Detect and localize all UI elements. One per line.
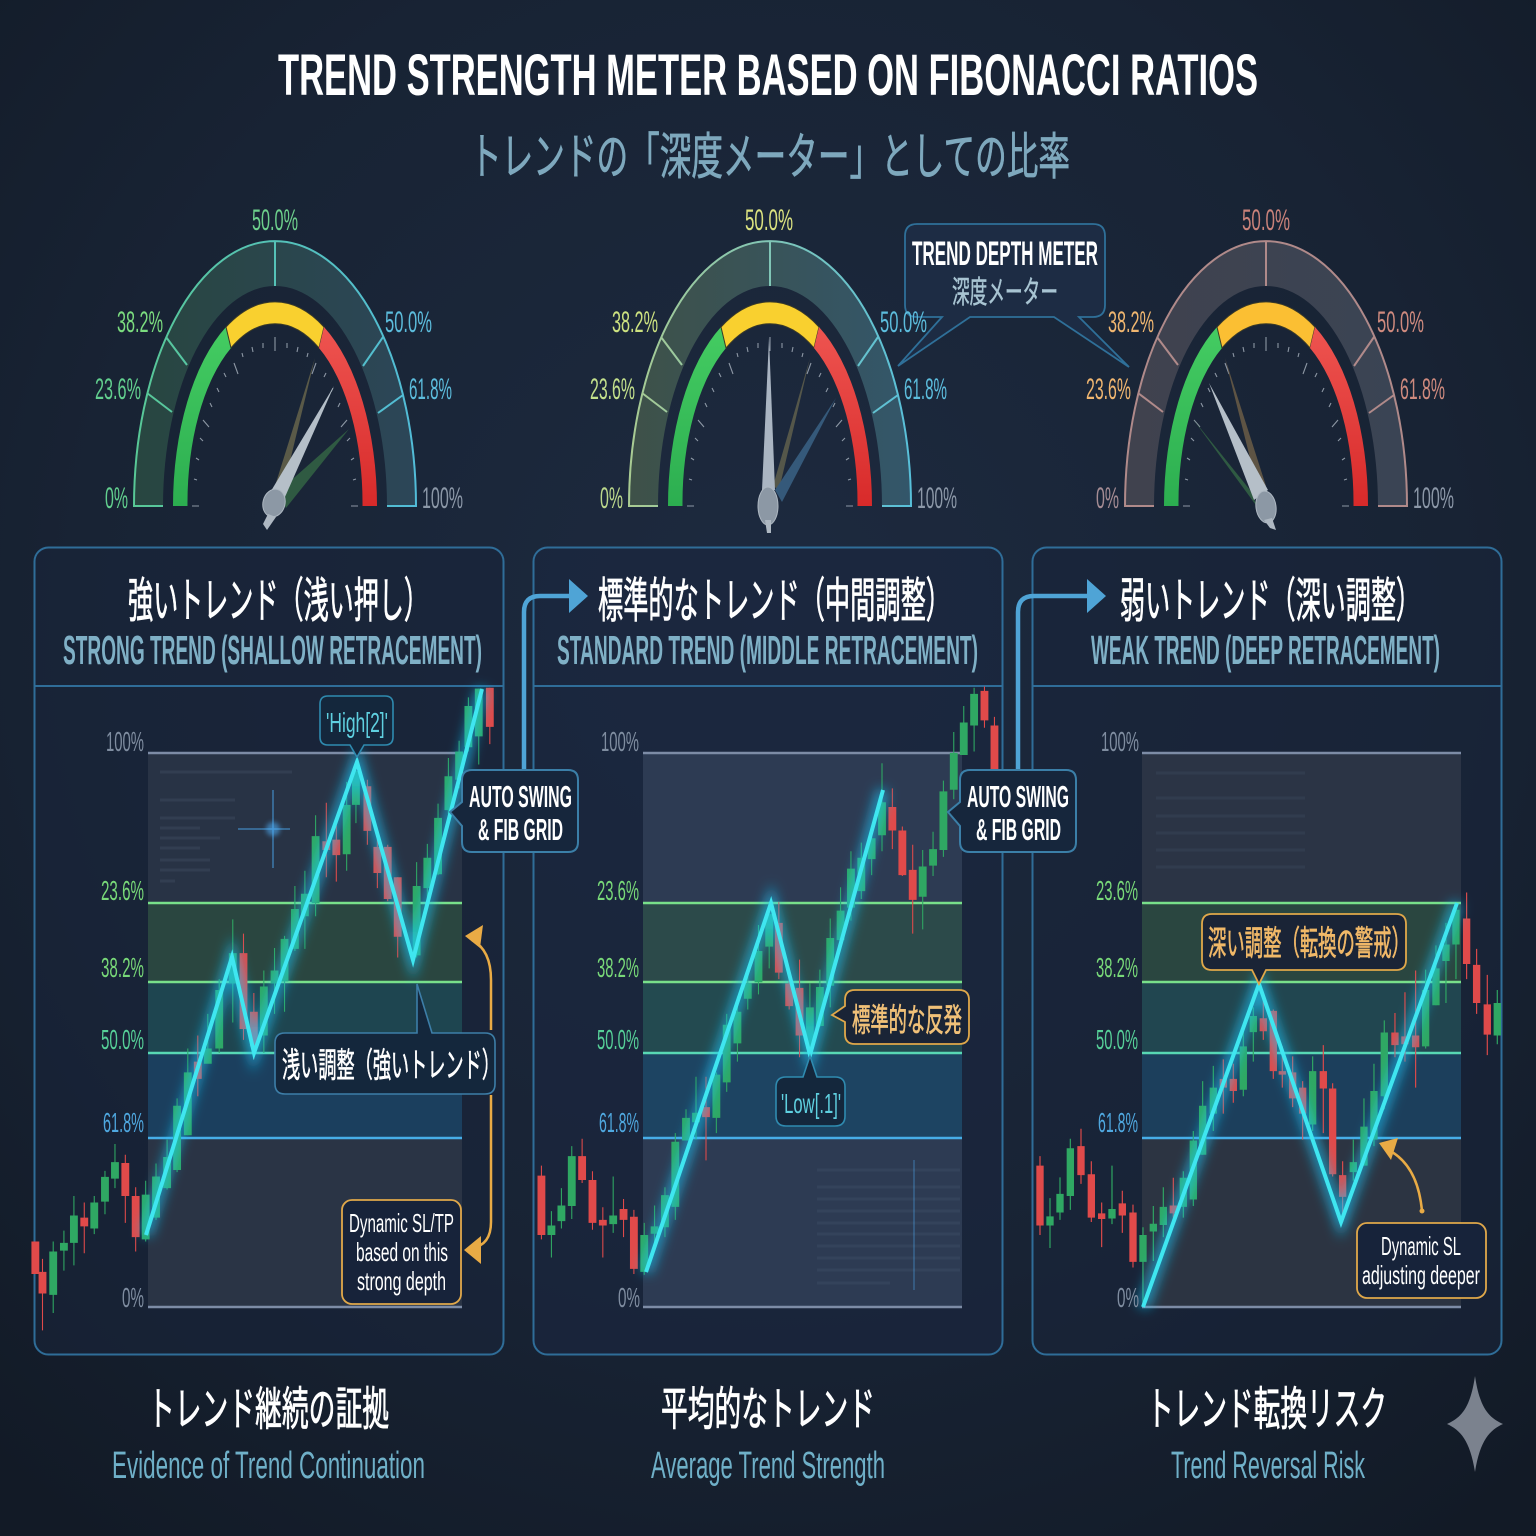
arrow: standard to weak	[1018, 579, 1106, 772]
callout: auto swing 2: & FIB GRID	[976, 812, 1061, 847]
callout: dynamic SL/TP: Dynamic SL/TP	[349, 1208, 454, 1238]
conclusion: trend continuation	[112, 1383, 425, 1487]
callout: standard rebound: 標準的な反発	[852, 1002, 962, 1038]
gauge labels: 0%	[105, 482, 128, 515]
axis labels: 100%	[601, 726, 639, 757]
callout: trend depth meter	[898, 224, 1129, 367]
gauge labels	[1086, 204, 1454, 515]
callout: trend depth meter: TREND DEPTH METER	[912, 235, 1098, 273]
gauge labels: 61.8%	[1400, 373, 1445, 406]
gauge labels: 50.0%	[880, 306, 927, 339]
gauge labels: 61.8%	[409, 373, 452, 406]
panel heading: 強いトレンド（浅い押し）	[128, 575, 429, 628]
callout: auto swing 1	[450, 770, 578, 852]
zigzag trend line	[646, 790, 883, 1272]
callout: standard rebound	[832, 990, 969, 1044]
gauge: standard trend	[590, 204, 957, 533]
conclusion: trend continuation: Evidence of Trend Continuation	[112, 1445, 425, 1487]
gauge labels: 100%	[422, 482, 463, 515]
fibonacci zones	[1142, 753, 1461, 1307]
gauge labels: 61.8%	[904, 373, 947, 406]
icon: sparkle	[1447, 1376, 1503, 1472]
gauge labels: 23.6%	[590, 373, 635, 406]
conclusion: average strength	[651, 1383, 885, 1487]
callout: shallow correction: 浅い調整（強いトレンド）	[282, 1047, 500, 1085]
callout: dynamic SL	[1357, 1223, 1486, 1298]
callout: dynamic SL/TP	[342, 1200, 461, 1304]
gauge labels: 0%	[600, 482, 623, 515]
callout: auto swing 1: & FIB GRID	[478, 812, 563, 847]
gauge labels	[590, 204, 957, 515]
text: STRONG TREND (SHALLOW RETRACEMENT)	[63, 627, 482, 673]
axis labels: 38.2%	[101, 952, 144, 983]
axis labels	[101, 726, 144, 1313]
gauge labels	[95, 204, 463, 515]
axis labels: 38.2%	[1096, 952, 1138, 983]
gauge labels: 0%	[1096, 482, 1119, 515]
callout: dynamic SL/TP: strong depth	[357, 1266, 446, 1296]
candlesticks	[541, 687, 994, 1275]
gauge needle	[1193, 358, 1278, 530]
arrow: strong to standard	[524, 579, 588, 772]
gauge: strong trend	[95, 204, 463, 530]
callout: high 2	[320, 696, 393, 757]
callout: auto swing 2: AUTO SWING	[967, 779, 1069, 814]
axis labels: 23.6%	[597, 875, 639, 906]
callout: auto swing 1: AUTO SWING	[469, 779, 572, 814]
zigzag trend line	[146, 689, 482, 1235]
gauge labels: 23.6%	[95, 373, 141, 406]
panel heading	[1091, 575, 1440, 673]
gauge labels: 50.0%	[745, 204, 793, 237]
panel heading	[63, 575, 482, 673]
axis labels: 0%	[122, 1282, 144, 1313]
gauge labels: 100%	[917, 482, 957, 515]
panel: standard trend	[534, 548, 1002, 1354]
conclusion: reversal risk: Trend Reversal Risk	[1171, 1445, 1366, 1487]
arrow: dynamic SL	[1379, 1138, 1424, 1214]
axis labels: 23.6%	[1096, 875, 1138, 906]
gauge needle	[758, 338, 836, 533]
gauge labels: 100%	[1413, 482, 1454, 515]
zigzag trend line	[1143, 903, 1457, 1307]
subtitle: トレンドの「深度メーター」としての比率	[470, 129, 1070, 185]
callout: auto swing 2	[948, 770, 1076, 852]
gauge labels: 50.0%	[1377, 306, 1424, 339]
callout: dynamic SL/TP: based on this	[356, 1237, 448, 1267]
candlesticks	[35, 688, 490, 1330]
axis labels: 61.8%	[599, 1107, 639, 1138]
callout: low 1: 'Low[.1]'	[781, 1088, 841, 1119]
axis labels: 50.0%	[101, 1024, 144, 1055]
gauge needle	[260, 358, 349, 530]
axis labels: 61.8%	[103, 1107, 144, 1138]
gauge labels: 38.2%	[612, 306, 658, 339]
gauge labels: 38.2%	[117, 306, 163, 339]
axis labels: 100%	[1101, 726, 1139, 757]
arrow: dynamic depth range	[464, 925, 491, 1264]
panel heading: 標準的なトレンド（中間調整）	[598, 575, 951, 628]
callout: trend depth meter: 深度メーター	[952, 275, 1058, 310]
callout: high 2: 'High[2]'	[326, 707, 388, 738]
gauge labels: 50.0%	[385, 306, 432, 339]
conclusion: trend continuation: トレンド継続の証拠	[148, 1383, 389, 1435]
candlesticks	[1040, 892, 1497, 1307]
text: STANDARD TREND (MIDDLE RETRACEMENT)	[557, 627, 978, 673]
callout: shallow correction	[275, 984, 500, 1094]
panel: strong trend	[34, 548, 504, 1354]
axis labels: 61.8%	[1098, 1107, 1138, 1138]
panel: weak trend	[1032, 548, 1502, 1354]
conclusion: reversal risk	[1147, 1383, 1387, 1487]
fibonacci zones	[148, 753, 462, 1307]
gauge labels: 50.0%	[252, 204, 298, 237]
fibonacci zones	[643, 753, 962, 1307]
axis labels: 0%	[618, 1282, 640, 1313]
gauge: weak trend	[1086, 204, 1454, 530]
callout: dynamic SL: Dynamic SL	[1381, 1231, 1461, 1261]
callout: deep correction	[1202, 914, 1410, 984]
panel heading	[557, 575, 978, 673]
axis labels: 38.2%	[597, 952, 639, 983]
gauge labels: 38.2%	[1108, 306, 1154, 339]
axis labels	[1096, 726, 1139, 1313]
conclusion: average strength: 平均的なトレンド	[661, 1383, 875, 1435]
axis labels: 50.0%	[1096, 1024, 1138, 1055]
gauge labels: 23.6%	[1086, 373, 1131, 406]
gauge labels: 50.0%	[1242, 204, 1290, 237]
conclusion: average strength: Average Trend Strength	[651, 1445, 885, 1487]
axis labels	[597, 726, 640, 1313]
axis labels: 50.0%	[597, 1024, 639, 1055]
axis labels: 0%	[1117, 1282, 1139, 1313]
axis labels: 23.6%	[101, 875, 144, 906]
callout: low 1	[776, 1056, 845, 1126]
axis labels: 100%	[106, 726, 144, 757]
